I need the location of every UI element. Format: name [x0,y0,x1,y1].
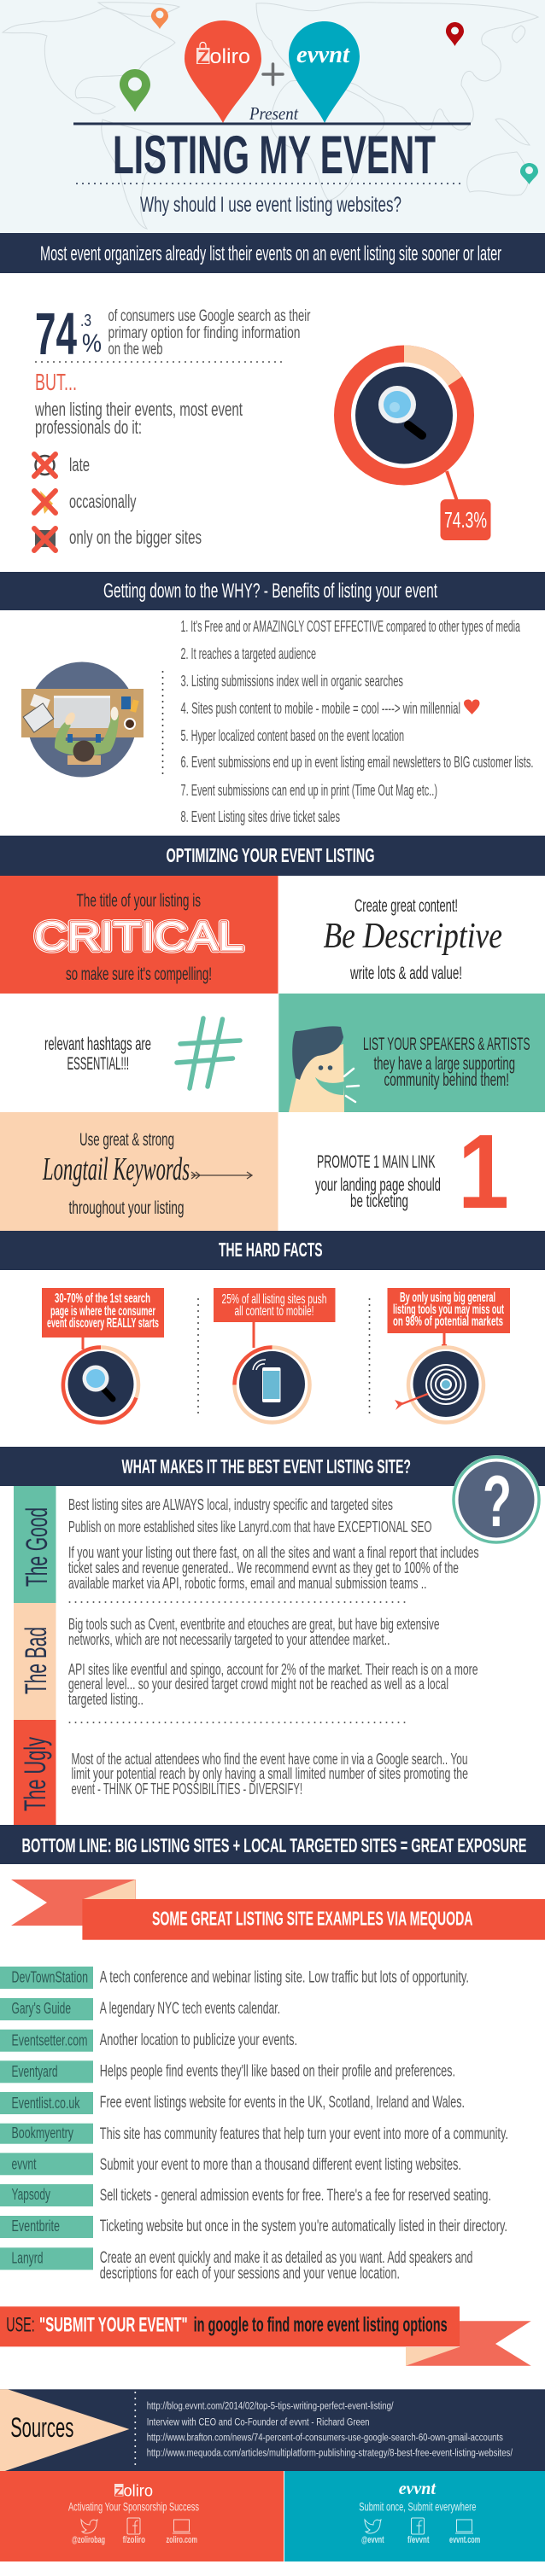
icon: facebook [127,2518,140,2534]
word: critical striped: CRITICAL [34,913,243,959]
row: Eventbrite: Eventbrite [12,2217,60,2235]
icon: orange map pin [151,8,168,29]
icon: teal map pin [520,163,538,184]
world map background [3,3,538,229]
panel: the bad: The Bad [20,1627,53,1694]
text: when listing [34,399,243,438]
banner: benefits heading [0,572,545,610]
panel: longtail keywords: throughout your listing [68,1198,185,1218]
social handles: f/evvnt [407,2535,430,2545]
banner: bottom line [0,1825,545,1864]
panel: hashtags [44,1018,240,1088]
panel: critical title: The title of your listing is [77,890,201,911]
panel: the ugly [14,1720,468,1825]
panel: promote one link: be ticketing [350,1191,408,1211]
illustration: person at desk [21,662,144,777]
icon: magnifier [378,386,422,435]
social handles [72,2535,197,2545]
row: Yapsody: Yapsody [12,2185,50,2203]
dotted divider [197,1299,199,1419]
fact: mobile: all content to mobile! [234,1304,314,1319]
panel: the ugly: event - THINK OF THE POSSIBILITIES - DIVERSIFY! [72,1780,302,1798]
word: critical striped: CRITICAL [34,913,243,959]
footer: evvnt [284,2471,545,2561]
row: Eventlist.co.uk: Eventlist.co.uk [12,2094,80,2112]
icon: bigger sites crossed [34,528,56,551]
ribbon: submit your event tip: "SUBMIT YOUR EVENT" [39,2314,188,2337]
text: only on the bigger sites: only on the bigger sites [69,527,202,548]
illustration: shouting face [289,1026,359,1112]
panel: hashtags: relevant hashtags are [44,1034,151,1054]
dotted divider [369,1299,371,1419]
ring chart with magnifier [63,1347,138,1422]
icon: green map pin [120,69,150,112]
row: Eventbrite [0,2216,507,2238]
panel: critical title [0,876,278,994]
list: benefits: 2. It reaches a targeted audience [181,645,316,662]
panel: longtail keywords: Use great & strong [79,1129,174,1150]
stat description: on the web [108,340,163,358]
panel: the ugly: The Ugly [19,1737,52,1811]
icon: occasionally crossed [34,491,56,514]
big number 74.3%: 74 [35,300,77,367]
row: Eventsetter.com [0,2030,297,2052]
row: Bookmyentry [0,2124,508,2144]
social handles: f/zoliro [123,2535,145,2545]
row: Gary's Guide: Gary's Guide [12,1999,71,2017]
panel: sources: Interview with CEO and Co-Founder of evvnt - Richard Green [147,2418,369,2428]
text: but: BUT... [35,369,77,395]
word: critical striped: CRITICAL [34,913,243,959]
footer: zoliro: Activating Your Sponsorship Success [68,2500,199,2514]
panel: google statistic [34,300,490,551]
panel: be descriptive: write lots & add value! [349,963,462,983]
row: Gary's Guide [0,1998,280,2020]
footer: zoliro [0,2471,284,2561]
icon: question mark badge: ? [483,1461,512,1542]
panel: promote one link: PROMOTE 1 MAIN LINK [317,1151,436,1172]
list: benefits [181,618,533,825]
ring chart with target [395,1347,483,1422]
list: benefits: 5. Hyper localized content based on the event location [181,727,404,744]
panel: speakers and artists [278,994,545,1112]
banner: best listing site heading [0,1447,545,1486]
ribbon: submit your event tip: USE: [6,2314,35,2337]
icon: laptop [173,2520,190,2533]
icon: question mark badge [452,1455,541,1544]
ring chart with phone [234,1347,309,1422]
icon: late crossed clock [34,454,56,476]
row: DevTownStation [0,1967,469,1989]
banner: intro [0,233,545,273]
row: Bookmyentry: Bookmyentry [12,2124,73,2142]
numeral one: 1 [458,1114,509,1231]
row: Eventlist.co.uk [0,2092,465,2114]
row: evvnt [0,2153,461,2175]
panel: promote one link [315,1114,509,1231]
icon: laptop [455,2520,473,2533]
banner: hard facts heading: THE HARD FACTS [219,1238,323,1261]
panel: the good: Best listing sites are ALWAYS local, industry specific and targeted sites [68,1496,393,1513]
evvnt logo pin: evvnt [296,42,350,68]
panel: hashtags: ESSENTIAL!!! [67,1053,129,1074]
text: occasionally: occasionally [69,491,137,512]
subtitle: Why should I use event listing websites? [140,193,401,217]
row: Eventsetter.com: Eventsetter.com [12,2031,87,2049]
row: Eventyard [0,2060,455,2083]
panel: header [0,0,545,233]
donut chart 74.3% [334,345,490,540]
fact: search discovery: page is where the consumer [50,1304,155,1319]
social handles: @evvnt [361,2535,384,2545]
big number 74.3%: .3 [80,312,91,330]
footer: zoliro: oliro [123,2482,153,2500]
icon: facebook [412,2518,424,2534]
list: benefits: 8. Event Listing sites drive ticket sales [181,808,340,825]
panel: critical title: so make sure it's compelling! [66,964,212,984]
icon: twitter [81,2520,97,2533]
word: critical striped: CRITICAL [34,913,243,959]
panel: the good: The Good [21,1507,54,1587]
fact: mobile: 25% of all listing sites push [222,1292,326,1307]
row: Lanyrd [0,2247,472,2282]
word: critical striped: CRITICAL [34,913,243,959]
banner: optimizing heading: OPTIMIZING YOUR EVENT LISTING [166,844,374,866]
dotted vertical divider [162,672,164,779]
text: when listing: when listing their events, most event [34,399,243,420]
social handles: zoliro.com [166,2535,197,2545]
fact: search discovery: 30-70% of the 1st search [55,1291,150,1306]
social handles: @zolirobag [72,2535,105,2545]
dotted divider [77,183,466,184]
icon: hash [177,1018,240,1088]
stat description: of consumers use Google search as their [108,306,311,325]
zoliro logo pin: Z [197,46,209,67]
footer: evvnt: Submit once, Submit everywhere [359,2500,477,2514]
list: benefits: 3. Listing submissions index well in organic searches [181,673,403,690]
panel: longtail keywords [0,1112,278,1231]
stat description [108,306,311,358]
fact: search discovery: event discovery REALLY starts [47,1316,159,1331]
icon: twitter [365,2520,381,2533]
table: listing site examples [0,1967,508,2282]
banner: hard facts heading [0,1231,545,1270]
row: Eventsetter.com: Another location to publicize your events. [100,2031,297,2049]
text: when listing: professionals do it: [35,417,142,438]
fact: mobile [214,1288,335,1422]
footer: zoliro: Z [114,2485,123,2499]
panel: the bad: targeted listing.. [68,1691,144,1708]
panel: be descriptive: Be Descriptive [323,917,502,956]
panel: the good [14,1486,478,1603]
text: present: Present [249,103,299,124]
row: Eventyard: Eventyard [12,2062,58,2080]
zoliro logo pin: oliro [210,45,250,68]
donut chart 74.3%: 74.3% [444,507,487,533]
row: Gary's Guide: A legendary NYC tech events calendar. [100,1999,280,2018]
panel: the bad: networks, which are not necessarily targeted to your attendee market.. [68,1631,390,1648]
footer: evvnt: evvnt [399,2478,437,2498]
row: Yapsody [0,2184,491,2206]
icon: heart [464,700,480,714]
stat description: primary option for finding information [108,323,301,342]
big number 74.3%: % [82,329,102,358]
social handles [361,2535,480,2545]
social handles: evvnt.com [449,2535,480,2545]
ribbon: submit your event tip [0,2306,531,2366]
ribbon: examples heading [11,1880,545,1940]
divider rule [73,123,471,125]
panel: longtail keywords: Longtail Keywords [42,1151,190,1187]
banner: optimizing heading [0,836,545,876]
panel: the bad [14,1603,478,1722]
icon: dark red map pin [446,22,464,46]
panel: promote one link: your landing page should [315,1174,441,1195]
icon: plus [263,64,283,85]
row: Lanyrd: Lanyrd [12,2249,43,2267]
panel: sources: http://blog.evvnt.com/2014/02/top-5-tips-writing-perfect-event-listing/ [147,2402,394,2412]
fact: big tools miss markets [388,1288,510,1422]
panel: sources [0,2389,545,2473]
zoliro logo pin [185,20,261,123]
text: late: late [69,454,90,475]
panel: sources: Sources [10,2412,73,2443]
row: DevTownStation: DevTownStation [12,1968,88,1986]
icon: arrow [191,1172,252,1179]
panel: be descriptive: Create great content! [355,895,458,916]
evvnt logo pin [289,21,360,123]
panel: be descriptive [323,895,502,983]
fact: search discovery [42,1288,164,1422]
row: evvnt: evvnt [12,2155,36,2173]
